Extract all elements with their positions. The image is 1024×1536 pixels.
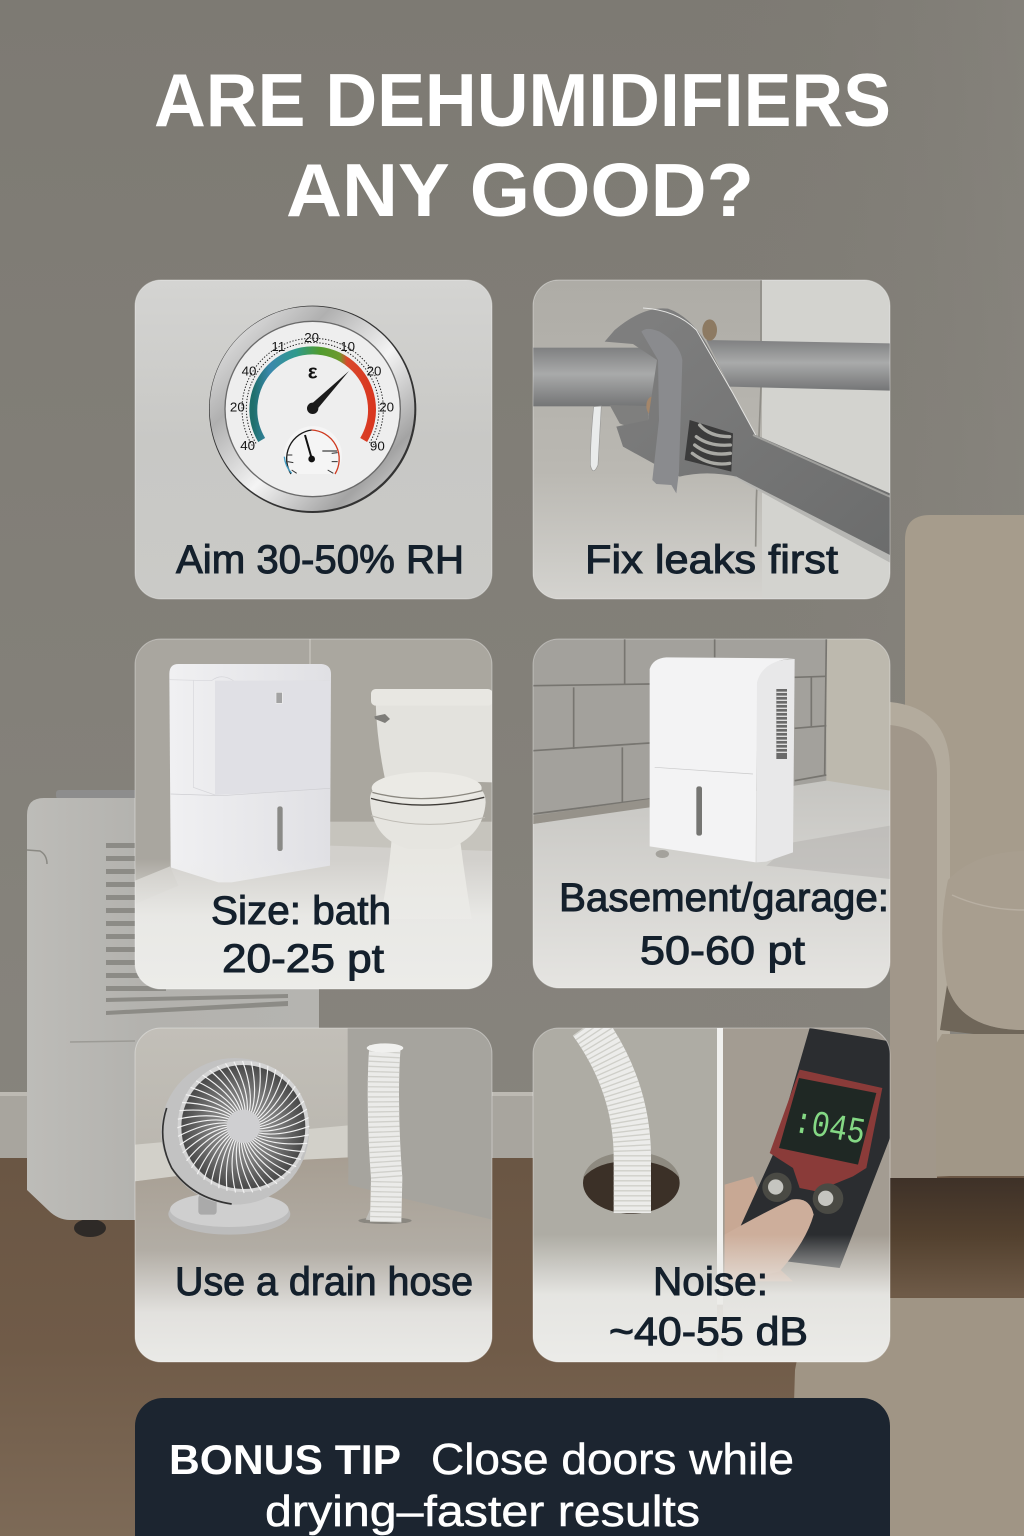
label: Use a drain hose bbox=[175, 1260, 473, 1304]
icon: hygrometer gauge: 11 bbox=[271, 339, 285, 354]
bonus tip callout bbox=[135, 1398, 890, 1536]
icon: wrench on leaking pipe bbox=[533, 280, 890, 563]
panel: noise level bbox=[533, 1025, 890, 1368]
basement scene bbox=[533, 639, 890, 992]
icon: small dial bbox=[284, 426, 342, 474]
label: Basement/garage: bbox=[559, 876, 889, 920]
label: Fix leaks first bbox=[585, 538, 838, 582]
label: 50-60 pt bbox=[640, 929, 805, 973]
icon: white dehumidifier bbox=[169, 664, 331, 882]
icon: hygrometer gauge: 40 bbox=[240, 438, 255, 453]
background sofa bbox=[890, 515, 1024, 1178]
bonus tip callout: drying–faster results bbox=[265, 1487, 700, 1536]
panel: drain hose bbox=[135, 1028, 492, 1365]
label bbox=[211, 889, 391, 981]
concrete wall bbox=[533, 280, 762, 599]
icon: hygrometer gauge: 20 bbox=[230, 400, 245, 415]
label: 20-25 pt bbox=[222, 937, 384, 981]
panel: bathroom sizing bbox=[135, 639, 493, 992]
panel: humidity target bbox=[135, 280, 492, 599]
icon: drain hose bbox=[358, 1043, 412, 1224]
label: Noise: bbox=[653, 1260, 768, 1304]
icon: hose in floor hole bbox=[583, 1025, 723, 1305]
title: ARE DEHUMIDIFIERS bbox=[154, 58, 891, 142]
label: Aim 30-50% RH bbox=[176, 538, 464, 582]
icon: hygrometer gauge: 90 bbox=[370, 439, 385, 454]
icon: hygrometer gauge: 20 bbox=[304, 330, 319, 345]
label: ~40-55 dB bbox=[609, 1310, 808, 1354]
bonus tip callout: BONUS TIP bbox=[169, 1436, 401, 1483]
icon: hygrometer gauge: 20 bbox=[367, 364, 381, 379]
label: Size: bath bbox=[211, 889, 391, 933]
label bbox=[559, 876, 889, 973]
icon: desk fan bbox=[161, 1057, 313, 1235]
room scene bbox=[135, 1028, 492, 1365]
label bbox=[610, 1266, 806, 1346]
panel: basement sizing bbox=[533, 639, 890, 992]
icon: hygrometer gauge bbox=[209, 306, 416, 513]
background dehumidifier bbox=[27, 790, 319, 1237]
icon: white dehumidifier bbox=[650, 657, 795, 862]
icon: toilet bbox=[135, 689, 493, 989]
bathroom scene bbox=[135, 639, 492, 992]
title: ANY GOOD? bbox=[286, 148, 754, 232]
icon: hygrometer gauge: 20 bbox=[379, 400, 394, 415]
title bbox=[154, 58, 891, 232]
bonus tip callout: Close doors while bbox=[431, 1435, 794, 1484]
panel: fix leaks bbox=[533, 280, 890, 599]
icon: sound meter in hand: :045 bbox=[790, 1102, 868, 1156]
icon: hygrometer gauge: ε bbox=[308, 360, 318, 383]
icon: hygrometer gauge: 40 bbox=[242, 364, 256, 379]
icon: hygrometer gauge: 10 bbox=[340, 339, 355, 354]
icon: sound meter in hand bbox=[533, 1028, 890, 1368]
